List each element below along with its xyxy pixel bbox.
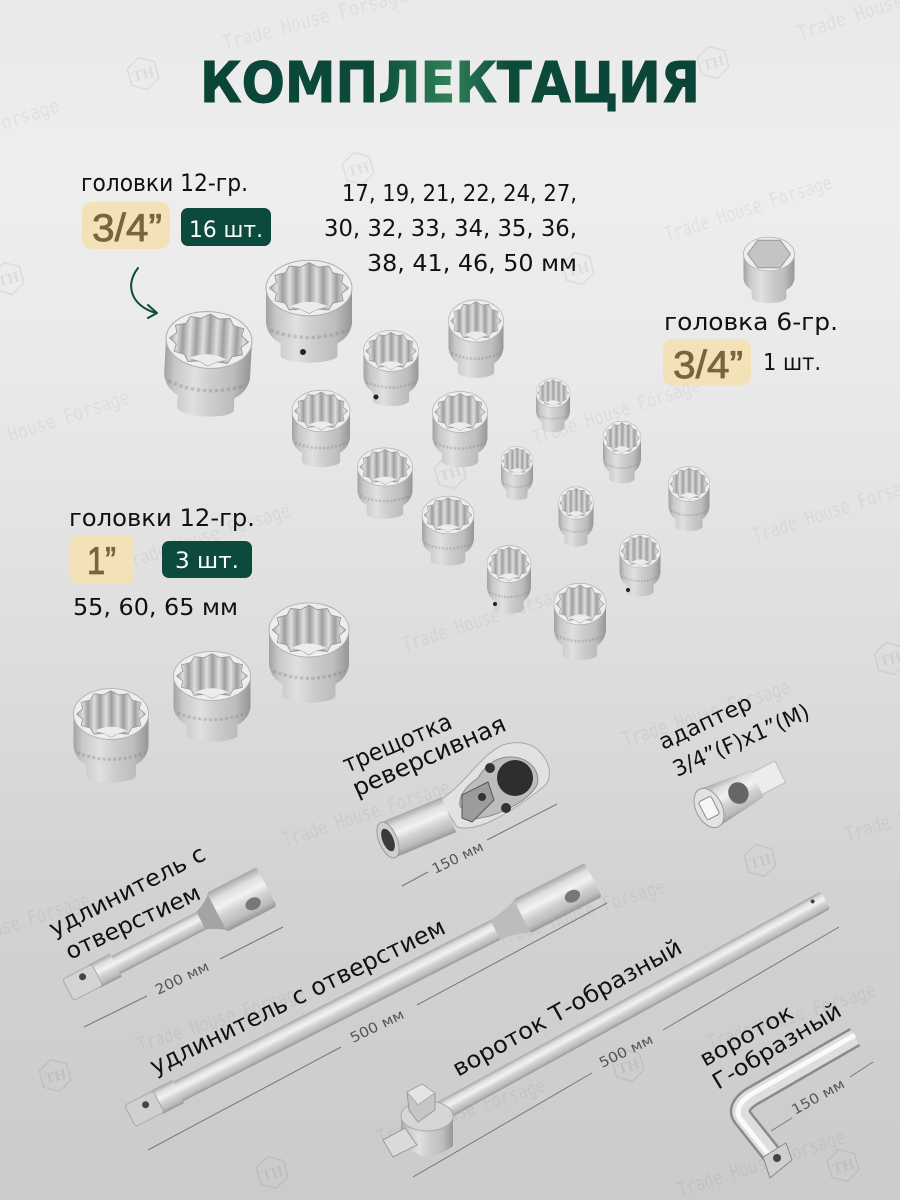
dimension: 200 mm: 200 мм <box>153 959 212 999</box>
watermarks: Trade House Forsage <box>619 675 793 752</box>
watermark logos: TH <box>260 1163 285 1184</box>
badge: 16 pieces: 16 шт. <box>189 218 263 243</box>
tool: L-handle <box>738 1035 855 1178</box>
watermark logos: TH <box>616 1056 641 1077</box>
badge: 3/4 inch <box>82 202 170 250</box>
watermarks: Trade House Forsage <box>279 775 453 852</box>
watermarks: Trade House Forsage <box>674 1125 848 1200</box>
label: adapter: 3/4”(F)x1”(M) <box>669 700 814 782</box>
sizes list: 17, 19, 21, 22, 24, 27, <box>342 181 577 207</box>
watermark logos: TH <box>43 1066 68 1087</box>
watermark logos: TH <box>566 259 591 280</box>
tool: adapter <box>688 753 790 833</box>
watermark logos: TH <box>438 463 463 484</box>
watermarks: Trade House Forsage <box>119 498 293 575</box>
label: ratchet: трещотка <box>338 707 456 779</box>
dimension: 500 mm extension: 500 мм <box>348 1007 407 1047</box>
badge: 3 pieces: 3 шт. <box>175 549 239 574</box>
3/4 sockets group <box>162 260 710 660</box>
watermarks: Trade House Forsage <box>661 170 835 247</box>
title: КОМПЛЕКТАЦИЯ <box>200 51 700 116</box>
dimension: 500 mm T-handle: 500 мм <box>597 1032 656 1072</box>
heading: 3/4 sockets: головки 12-гр. <box>81 169 248 197</box>
label: extension 200 mm: удлинитель с <box>45 841 210 942</box>
sizes list <box>324 181 577 277</box>
badge: 1 inch: 1” <box>87 540 116 583</box>
label: ratchet: реверсивная <box>348 710 510 802</box>
watermarks: Trade House Forsage <box>529 373 703 450</box>
watermark logos: TH <box>748 851 773 872</box>
dimension: 150 mm L-handle: 150 мм <box>789 1076 848 1118</box>
tool: ratchet <box>372 743 549 861</box>
1 inch sockets group <box>74 603 349 783</box>
heading: 1 inch sockets: головки 12-гр. <box>69 504 255 532</box>
sizes list: 30, 32, 33, 34, 35, 36, <box>324 216 577 242</box>
watermarks: Trade House Forsage <box>494 874 668 951</box>
badge: 3/4 inch <box>663 339 751 387</box>
heading: 6-point socket: головка 6-гр. <box>664 308 838 336</box>
watermarks: Trade House Forsage <box>134 980 308 1057</box>
tool: extension 200 mm <box>58 867 277 1010</box>
watermarks: Trade House Forsage <box>374 1073 548 1150</box>
dimension: 150 mm L-handle <box>771 1062 873 1131</box>
dimension: 200 mm <box>84 927 283 1027</box>
badge: 1 inch <box>70 535 134 583</box>
watermark logos: TH <box>346 159 371 180</box>
watermarks: Trade House Forsage <box>399 580 573 657</box>
arrow <box>131 268 157 318</box>
label: adapter: адаптер <box>655 691 756 755</box>
badge: 3/4 inch: 3/4” <box>92 207 162 250</box>
label: L-handle: Г-образный <box>708 999 846 1095</box>
watermark logos: TH <box>831 1156 856 1177</box>
sizes: 1 inch: 55, 60, 65 мм <box>73 595 238 621</box>
badge: 3/4 inch: 3/4” <box>673 344 743 387</box>
watermark logos: TH <box>131 64 156 85</box>
label: extension 200 mm: отверстием <box>62 880 205 965</box>
dimension: 500 mm T-handle <box>413 927 839 1177</box>
badge: 3 pieces <box>162 541 252 578</box>
badge: 16 pieces <box>181 208 271 246</box>
count: 1 piece: 1 шт. <box>763 350 821 376</box>
label: extension 500 mm: удлинитель с отверстием <box>145 913 450 1080</box>
watermark logos: TH <box>701 53 726 74</box>
dimension: 150 mm ratchet: 150 мм <box>430 839 486 878</box>
6-point socket <box>744 237 794 303</box>
dimension: 500 mm extension <box>148 903 607 1150</box>
label: L-handle: вороток <box>696 1000 798 1072</box>
tool: T-handle <box>383 891 830 1157</box>
label: T-handle: вороток Т-образный <box>448 934 687 1082</box>
tool: extension 500 mm <box>121 863 602 1133</box>
dimension: 150 mm ratchet <box>402 804 557 886</box>
sizes list: 38, 41, 46, 50 мм <box>367 251 577 277</box>
